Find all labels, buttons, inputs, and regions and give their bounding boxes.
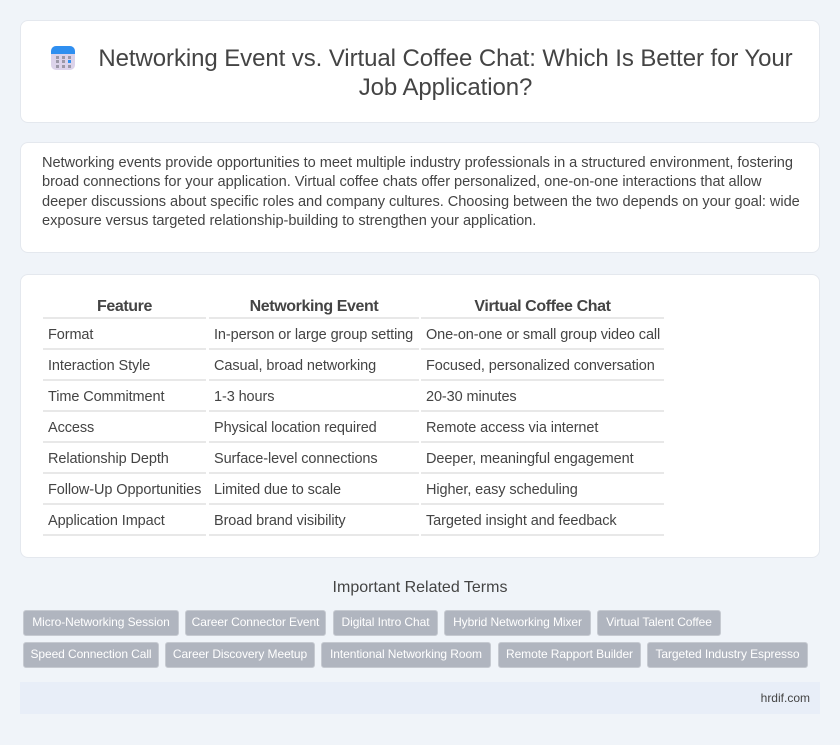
tag: Remote Rapport Builder xyxy=(506,647,633,661)
tag: Micro-Networking Session xyxy=(32,615,170,629)
intro text: deeper discussions about specific roles and company cultures. Choosing between the two depends on your goal: wide xyxy=(42,194,800,210)
table column: networking event: In-person or large group setting xyxy=(214,327,413,343)
intro text: exposure versus targeted relationship-building to strengthen your application. xyxy=(42,213,536,229)
tag: Intentional Networking Room xyxy=(330,647,482,661)
tag xyxy=(498,642,641,668)
table column: feature: Access xyxy=(48,420,94,436)
table column: feature: Follow-Up Opportunities xyxy=(48,482,201,498)
tag xyxy=(185,610,326,636)
tag xyxy=(647,642,808,668)
table column: networking event: Surface-level connections xyxy=(214,451,378,467)
tag xyxy=(23,642,159,668)
tag: Speed Connection Call xyxy=(30,647,152,661)
header: feature: Feature xyxy=(97,298,152,315)
table column: virtual coffee chat: 20-30 minutes xyxy=(426,389,517,405)
tag xyxy=(321,642,491,668)
table column: virtual coffee chat: Higher, easy scheduling xyxy=(426,482,578,498)
table column: networking event: 1-3 hours xyxy=(214,389,274,405)
footer xyxy=(20,682,820,714)
tag xyxy=(165,642,315,668)
panel: comparison table xyxy=(20,274,820,558)
intro text: Networking events provide opportunities to meet multiple industry professionals in a structured environment, fostering xyxy=(42,155,793,171)
table column: networking event: Physical location required xyxy=(214,420,377,436)
table column: networking event: Limited due to scale xyxy=(214,482,341,498)
table column: feature: Format xyxy=(48,327,93,343)
tag: Hybrid Networking Mixer xyxy=(453,615,582,629)
title: Job Application? xyxy=(359,74,532,101)
tag xyxy=(444,610,591,636)
table column: feature xyxy=(43,298,206,536)
tag: Digital Intro Chat xyxy=(342,615,429,629)
tag xyxy=(333,610,438,636)
panel: intro xyxy=(20,142,820,253)
tag: Virtual Talent Coffee xyxy=(606,615,712,629)
tag: Career Discovery Meetup xyxy=(173,647,307,661)
panel: header xyxy=(20,20,820,123)
title xyxy=(98,45,793,101)
table column: virtual coffee chat: Focused, personalized conversation xyxy=(426,358,655,374)
table column: networking event: Broad brand visibility xyxy=(214,513,346,529)
table column: virtual coffee chat: One-on-one or small group video call xyxy=(426,327,660,343)
related term tags xyxy=(23,610,808,668)
table column: networking event: Casual, broad networking xyxy=(214,358,376,374)
table column: feature: Interaction Style xyxy=(48,358,150,374)
header: networking event: Networking Event xyxy=(250,298,378,315)
intro text xyxy=(42,155,800,229)
icon: calendar xyxy=(51,46,75,70)
table column: feature: Application Impact xyxy=(48,513,165,529)
intro text: broad connections for your application. Virtual coffee chats offer personalized, one-on-one interactions that allow xyxy=(42,174,762,190)
tag xyxy=(23,610,179,636)
heading: related terms: Important Related Terms xyxy=(333,579,507,596)
tag: Career Connector Event xyxy=(192,615,319,629)
table column: networking event xyxy=(209,298,419,536)
tag: Targeted Industry Espresso xyxy=(656,647,800,661)
title: Networking Event vs. Virtual Coffee Chat: Which Is Better for Your xyxy=(98,45,793,72)
header: virtual coffee chat: Virtual Coffee Chat xyxy=(474,298,611,315)
table column: feature: Time Commitment xyxy=(48,389,164,405)
table column: virtual coffee chat: Deeper, meaningful engagement xyxy=(426,451,634,467)
footer source label: hrdif.com xyxy=(761,691,810,705)
table column: virtual coffee chat: Remote access via internet xyxy=(426,420,598,436)
table column: virtual coffee chat xyxy=(421,298,664,536)
tag xyxy=(597,610,721,636)
table column: feature: Relationship Depth xyxy=(48,451,169,467)
table column: virtual coffee chat: Targeted insight and feedback xyxy=(426,513,617,529)
